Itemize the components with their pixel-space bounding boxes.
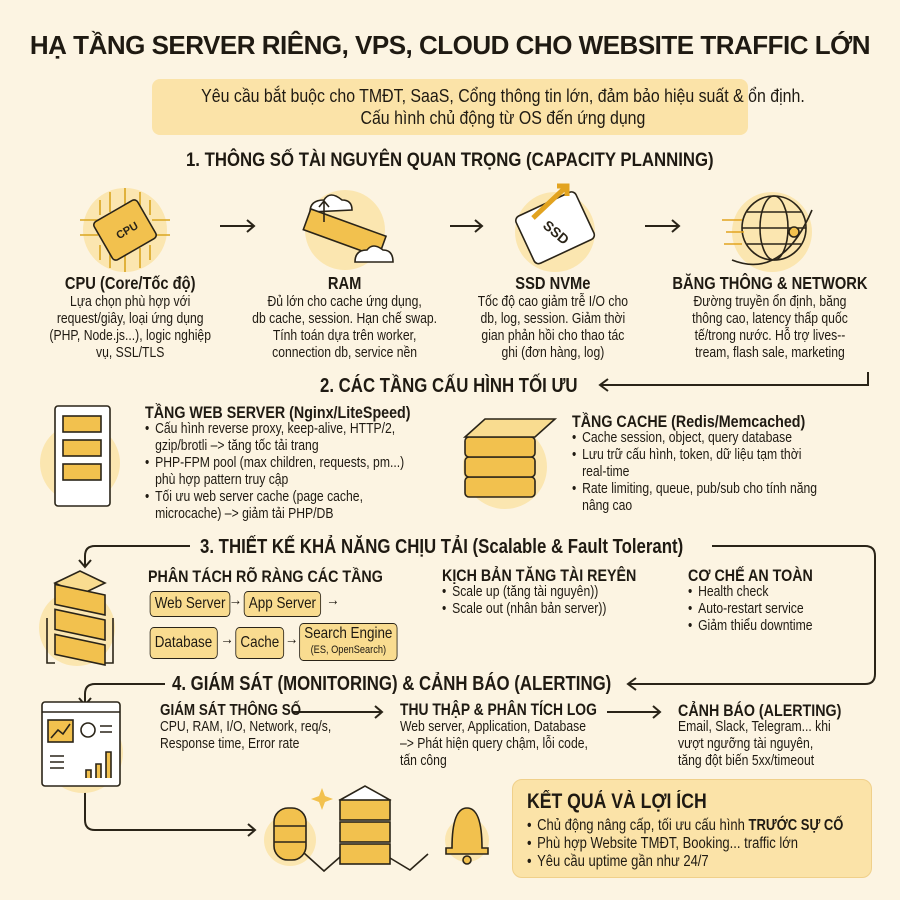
monitoring column <box>160 700 331 752</box>
log column: THU THẬP & PHÂN TÍCH LOG <box>400 701 597 719</box>
web server text: phù hợp pattern truy cập <box>155 472 288 488</box>
cpu text: vụ, SSL/TLS <box>96 345 164 361</box>
cache text: TẦNG CACHE (Redis/Memcached) <box>572 412 805 431</box>
web server text: Cấu hình reverse proxy, keep-alive, HTTP/2, <box>155 421 395 437</box>
network text: thông cao, latency thấp quốc <box>692 311 848 327</box>
layers column: → <box>326 592 340 609</box>
results box: KẾT QUẢ VÀ LỢI ÍCH <box>527 790 707 813</box>
web server text: PHP-FPM pool (max children, requests, pm...) <box>155 455 404 471</box>
log column: –> Phát hiện query chậm, lỗi code, <box>400 736 588 752</box>
network text: tream, flash sale, marketing <box>695 345 845 361</box>
icon: server stack <box>39 570 115 666</box>
ssd text: SSD NVMe <box>515 273 590 293</box>
cache text: nâng cao <box>582 498 632 514</box>
monitoring column: GIÁM SÁT THÔNG SỐ <box>160 702 301 719</box>
web server text: TẦNG WEB SERVER (Nginx/LiteSpeed) <box>145 403 411 422</box>
icon: ssd: SSD <box>540 217 572 248</box>
alerting column <box>678 701 841 769</box>
layers column: App Server <box>249 595 316 612</box>
web server text: microcache) –> giảm tải PHP/DB <box>155 506 333 522</box>
icon group: db server bell <box>264 785 489 872</box>
cache text <box>572 412 817 514</box>
scaling column: Scale up (tăng tài nguyên)) <box>452 584 598 600</box>
alerting column: vượt ngưỡng tài nguyên, <box>678 736 813 752</box>
icon: cache <box>463 418 557 509</box>
cpu text: Lựa chọn phù hợp với <box>70 294 190 310</box>
icon: cpu: CPU <box>114 220 141 242</box>
cache text: Cache session, object, query database <box>582 430 792 446</box>
web server text <box>145 403 411 522</box>
section 4 heading: 4. GIÁM SÁT (MONITORING) & CẢNH BÁO (ALERTING) <box>172 673 611 695</box>
icon: ssd <box>515 184 596 272</box>
alerting column: CẢNH BÁO (ALERTING) <box>678 701 841 720</box>
ssd text: gian phản hồi cho thao tác <box>481 328 624 344</box>
results box: Phù hợp Website TMĐT, Booking... traffic lớn <box>537 835 798 852</box>
layers column: PHÂN TÁCH RÕ RÀNG CÁC TẦNG <box>148 567 383 586</box>
results box <box>512 779 872 878</box>
icon: globe <box>722 192 813 272</box>
ssd text: db, log, session. Giảm thời <box>481 311 625 327</box>
log column <box>400 700 597 769</box>
safety column: Health check <box>698 584 768 600</box>
cpu text <box>49 273 211 361</box>
web server text: Tối ưu web server cache (page cache, <box>155 489 363 505</box>
icon: cpu <box>80 188 170 272</box>
network text <box>672 273 868 361</box>
safety column: Auto-restart service <box>698 601 804 617</box>
layers column: → <box>229 592 242 609</box>
layers column: Database <box>155 634 212 651</box>
ram text: connection db, service nền <box>272 345 417 361</box>
layers column: → <box>285 631 298 648</box>
layers column: Search Engine <box>304 625 392 642</box>
alerting column: tăng đột biến 5xx/timeout <box>678 753 814 769</box>
results box: Chủ động nâng cấp, tối ưu cấu hình TRƯỚC SỰ CỐ <box>537 817 843 834</box>
scaling column: KỊCH BẢN TĂNG TÀI REYÊN <box>442 566 636 585</box>
section 1 heading: 1. THÔNG SỐ TÀI NGUYÊN QUAN TRỌNG (CAPACITY PLANNING) <box>186 149 714 171</box>
monitoring column: Response time, Error rate <box>160 736 299 752</box>
section 2 heading: 2. CÁC TẦNG CẤU HÌNH TỐI ƯU <box>320 375 578 397</box>
icon: web server <box>40 405 120 507</box>
web server text: gzip/brotli –> tăng tốc tải trang <box>155 438 319 454</box>
log column: tấn công <box>400 753 447 769</box>
section 3 heading: 3. THIẾT KẾ KHẢ NĂNG CHỊU TẢI (Scalable & Fault Tolerant) <box>200 536 683 558</box>
layers column <box>148 567 398 661</box>
subtitle box: Cấu hình chủ động từ OS đến ứng dụng <box>360 107 645 128</box>
cpu text: CPU (Core/Tốc độ) <box>65 273 196 293</box>
safety column <box>688 566 813 634</box>
scaling column: Scale out (nhân bản server)) <box>452 601 606 617</box>
layers column: Cache <box>240 634 279 651</box>
results box: Yêu cầu uptime gần như 24/7 <box>537 853 709 870</box>
cpu text: request/giây, loại ứng dụng <box>57 311 204 327</box>
safety column: CƠ CHẾ AN TOÀN <box>688 566 813 585</box>
title: HẠ TẦNG SERVER RIÊNG, VPS, CLOUD CHO WEBSITE TRAFFIC LỚN <box>30 30 870 60</box>
safety column: Giảm thiểu downtime <box>698 618 812 634</box>
layers column: (ES, OpenSearch) <box>311 644 386 656</box>
network text: Đường truyền ổn định, băng <box>693 294 846 310</box>
ram text: db cache, session. Hạn chế swap. <box>252 311 437 327</box>
scaling column <box>442 566 636 617</box>
ram text: Đủ lớn cho cache ứng dụng, <box>267 294 422 310</box>
layers column: Web Server <box>155 595 225 612</box>
ssd text: ghi (đơn hàng, log) <box>501 345 604 361</box>
ram text <box>252 273 437 361</box>
ram text: RAM <box>328 273 361 293</box>
cache text: real-time <box>582 464 629 480</box>
icon: ram <box>302 190 394 270</box>
log column: Web server, Application, Database <box>400 719 586 735</box>
network text: tế/trong nước. Hỗ trợ lives-- <box>695 328 845 344</box>
ssd text <box>478 273 628 361</box>
network text: BĂNG THÔNG & NETWORK <box>672 273 868 293</box>
ram text: Tính toán dựa trên worker, <box>273 328 416 344</box>
ssd text: Tốc độ cao giảm trễ I/O cho <box>478 294 628 310</box>
cache text: Lưu trữ cấu hình, token, dữ liệu tạm thời <box>582 447 801 463</box>
icon: dashboard <box>41 701 123 793</box>
subtitle box <box>152 79 748 135</box>
subtitle box: Yêu cầu bắt buộc cho TMĐT, SaaS, Cổng thông tin lớn, đảm bảo hiệu suất & ổn định. <box>201 85 805 106</box>
cache text: Rate limiting, queue, pub/sub cho tính năng <box>582 481 817 497</box>
layers column: → <box>220 631 234 648</box>
monitoring column: CPU, RAM, I/O, Network, req/s, <box>160 719 331 735</box>
cpu text: (PHP, Node.js...), logic nghiệp <box>49 328 211 344</box>
alerting column: Email, Slack, Telegram... khi <box>678 719 831 735</box>
